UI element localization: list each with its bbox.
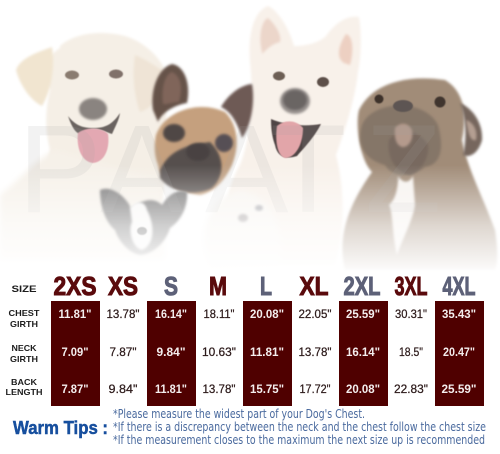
text block: tips: *Please measure the widest part of your Dog's Chest.	[113, 407, 365, 421]
values on dark columns: 25.59"	[442, 382, 476, 396]
values on dark columns: 11.81"	[58, 307, 92, 321]
values on light columns: 13.78"	[106, 307, 140, 321]
values on light columns	[106, 307, 428, 396]
values on light columns: 18.11"	[204, 307, 234, 321]
values on dark columns: 20.47"	[443, 345, 475, 359]
row labels: LENGTH	[6, 387, 42, 397]
values on dark columns: 11.81"	[155, 382, 187, 396]
row labels	[6, 284, 42, 397]
values on dark columns: 7.09"	[62, 345, 88, 359]
text block: tips	[113, 407, 486, 447]
size headers: XS	[108, 271, 138, 301]
size headers: 4XL	[442, 271, 476, 301]
size headers: XL	[300, 271, 329, 301]
values on dark columns: 15.75"	[250, 382, 284, 396]
values on dark columns: 35.43"	[442, 307, 476, 321]
dog: french bulldog	[152, 64, 253, 195]
row labels: SIZE	[12, 284, 36, 295]
values on light columns: 13.78"	[298, 345, 332, 359]
values on light columns: 22.05"	[298, 307, 332, 321]
dog: brown bulldog	[342, 78, 497, 270]
size headers: S	[164, 271, 178, 301]
size headers: 3XL	[394, 271, 428, 301]
dog: white puppy	[204, 190, 281, 270]
row labels: GIRTH	[10, 319, 38, 329]
size headers	[54, 271, 476, 301]
values on light columns: 17.72"	[300, 382, 330, 396]
values on dark columns: 16.14"	[155, 307, 187, 321]
values on light columns: 18.5"	[399, 345, 423, 359]
watermark: PAATZ	[18, 100, 441, 239]
row labels: NECK	[12, 343, 37, 353]
values on dark columns: 16.14"	[346, 345, 380, 359]
row labels: BACK	[11, 377, 38, 387]
dog: labrador	[0, 33, 166, 260]
dog: white shepherd	[225, 6, 361, 265]
values on dark columns: 7.87"	[62, 382, 88, 396]
values on dark columns: 20.08"	[250, 307, 284, 321]
values on dark columns: 11.81"	[250, 345, 284, 359]
size headers: L	[260, 271, 272, 301]
size headers: M	[209, 271, 227, 301]
size headers: 2XS	[54, 271, 96, 301]
values on dark columns	[58, 307, 476, 396]
row labels: CHEST	[8, 308, 40, 318]
column bars	[51, 301, 484, 406]
row labels: GIRTH	[10, 354, 38, 364]
size headers: 2XL	[344, 271, 381, 301]
values on light columns: 10.63"	[202, 345, 236, 359]
heading: warm tips: Warm Tips :	[13, 418, 108, 438]
values on light columns: 7.87"	[110, 345, 136, 359]
bottom fade	[0, 165, 500, 275]
values on dark columns: 20.08"	[346, 382, 380, 396]
values on dark columns: 25.59"	[346, 307, 380, 321]
dog: chihuahua	[100, 189, 187, 255]
values on light columns: 13.78"	[202, 382, 236, 396]
values on light columns: 30.31"	[395, 307, 427, 321]
values on light columns: 22.83"	[394, 382, 428, 396]
values on dark columns: 9.84"	[156, 345, 186, 359]
values on light columns: 9.84"	[108, 382, 138, 396]
table: size chart	[6, 271, 484, 406]
